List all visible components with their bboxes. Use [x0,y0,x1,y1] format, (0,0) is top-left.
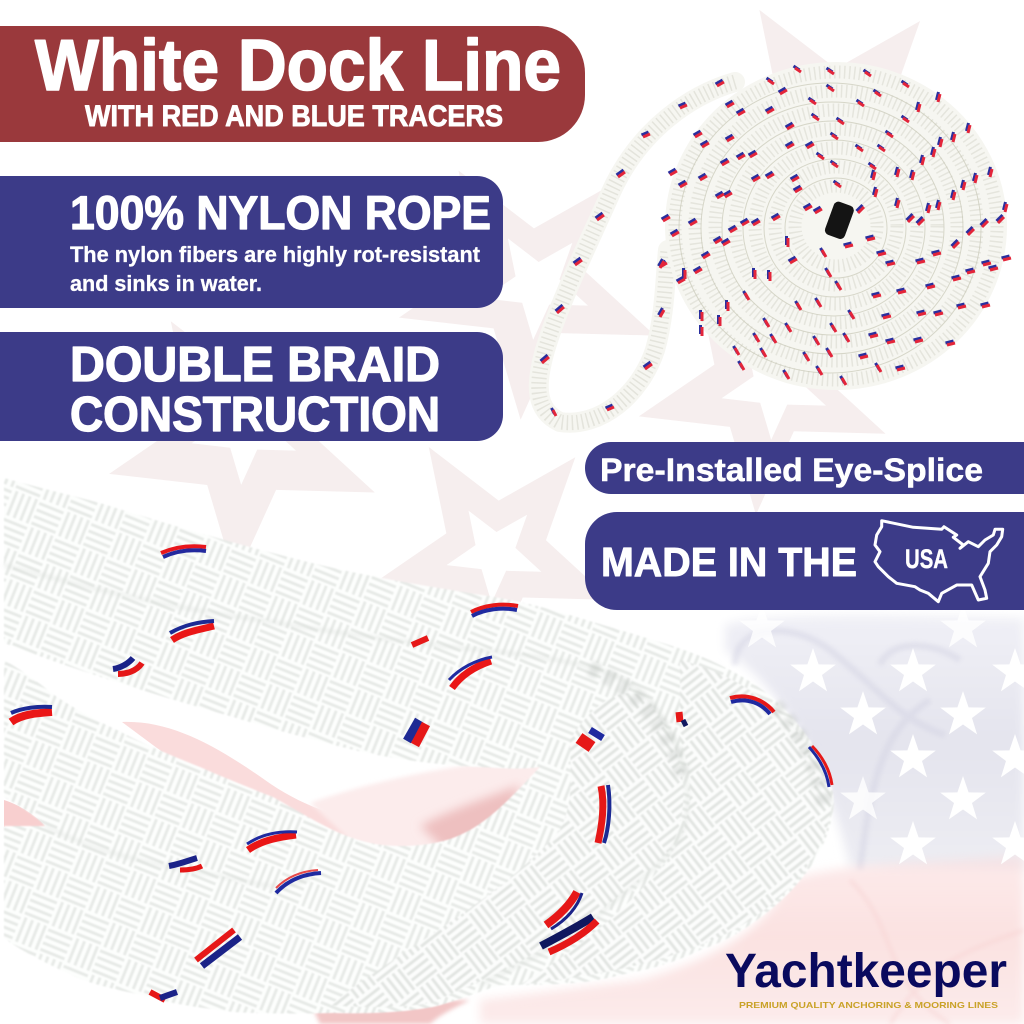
description text: The nylon fibers are highly rot-resistant [70,242,481,267]
eye-splice tail loop [539,82,735,423]
icon: USA map outline [875,521,1003,602]
coil tracers: red stripes [542,68,1011,416]
heading: double braid construction [70,338,440,442]
big white braided rope close-up [4,478,834,1014]
black rope end [824,200,855,240]
icon: USA map outline: USA [905,544,948,574]
panel: title [0,26,585,142]
heading: double braid construction: DOUBLE BRAID [70,338,440,392]
background: American flag smoke [310,604,1024,1024]
logo tagline: PREMIUM QUALITY ANCHORING & MOORING LINES [739,1000,998,1010]
heading: 100% nylon rope: 100% NYLON ROPE [70,186,491,239]
background: pale star shapes [70,0,1020,707]
description text [70,242,481,296]
logo: Yachtkeeper: Yachtkeeper [725,945,1007,998]
subheading: tracers: WITH RED AND BLUE TRACERS [85,100,503,133]
label: made in the: MADE IN THE [601,539,857,585]
panel: made in the USA [585,512,1024,610]
background: pink smoke behind big rope [4,722,560,860]
big rope tracers: red and blue [11,546,832,1000]
heading: White Dock Line: White Dock Line [35,26,561,106]
coiled rope product photo [539,62,1011,423]
panel: double braid [0,332,503,442]
coil spiral rings [665,62,1007,390]
panel: eye-splice [585,442,1024,494]
coil tracers: blue stripes [540,66,1010,414]
description text: and sinks in water. [70,271,262,296]
heading: double braid construction: CONSTRUCTION [70,388,440,442]
panel: nylon rope [0,176,503,308]
label: pre-installed eye-splice: Pre-Installed Eye-Splice [600,452,983,488]
